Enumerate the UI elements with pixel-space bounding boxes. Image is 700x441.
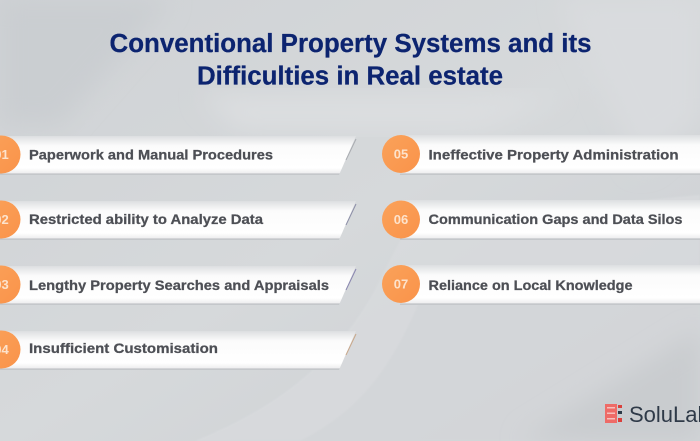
item 05: 05 [394,146,408,162]
item 04 [0,330,356,370]
item 03: Lengthy Property Searches and Appraisals [29,278,329,293]
item 06: 06 [394,212,408,227]
item 04: Insufficient Customisation [29,341,218,356]
item 02: Restricted ability to Analyze Data [29,212,264,227]
item 07: 07 [394,276,408,292]
item 05 [382,135,700,175]
item 01: Paperwork and Manual Procedures [29,148,273,162]
title: Conventional Property Systems and its [110,30,592,58]
title [110,30,592,90]
icon: SoluLab logo [605,404,622,423]
item 06: Communication Gaps and Data Silos [428,212,682,227]
item 06 [382,200,700,240]
item 01 [0,136,356,175]
item 07: Reliance on Local Knowledge [428,278,633,293]
item 07 [382,265,700,305]
item 05: Ineffective Property Administration [428,148,678,162]
item 03 [0,266,356,305]
item 02 [0,200,356,240]
title: Difficulties in Real estate [197,62,503,90]
